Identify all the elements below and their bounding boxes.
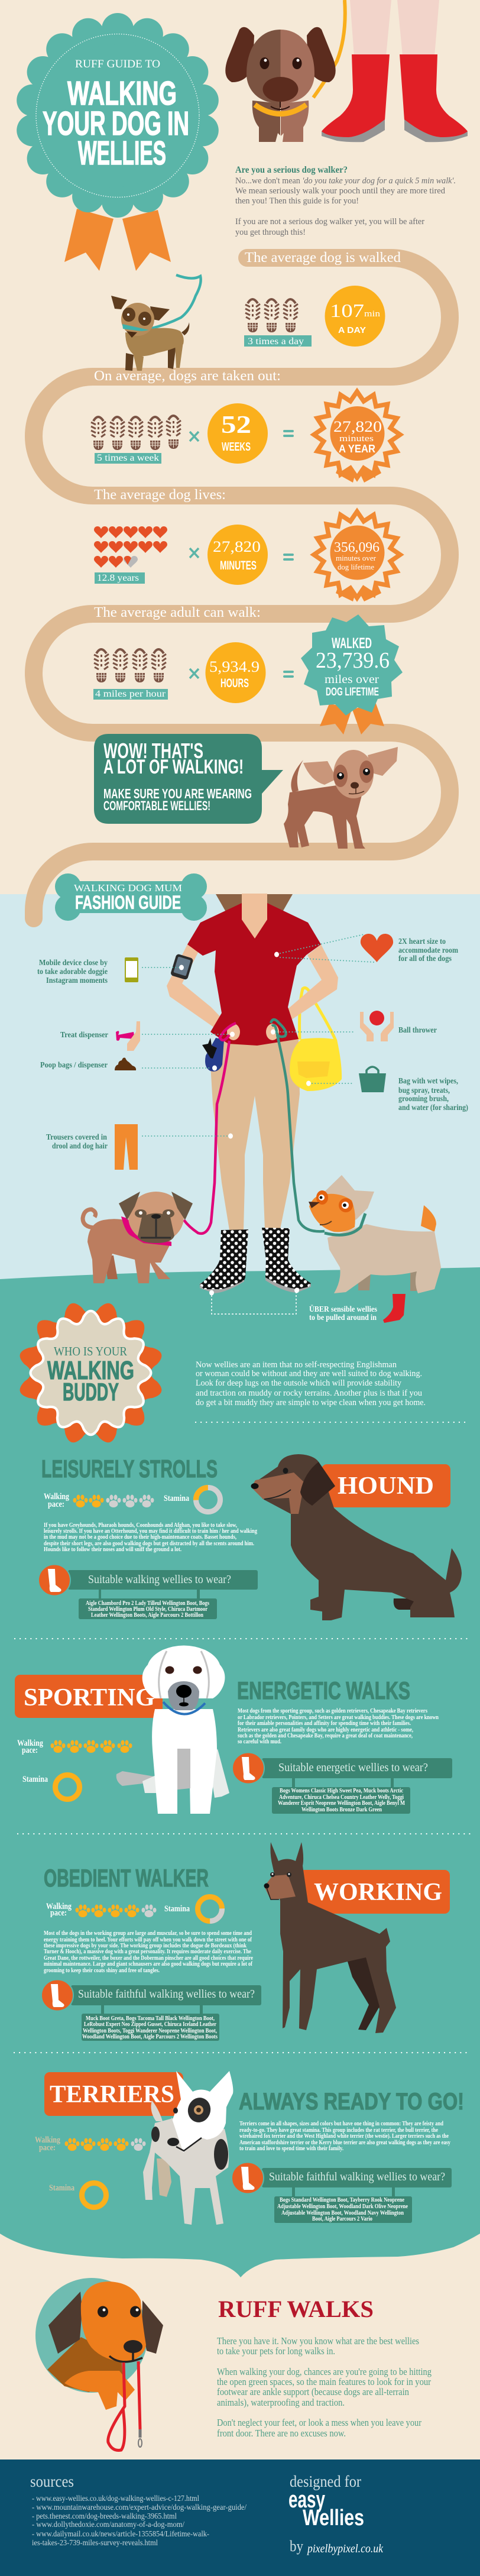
walking pace rating: pace: [39, 2143, 56, 2153]
suitable wellies box [38, 1565, 258, 1619]
title text [43, 58, 189, 172]
sources list [30, 2473, 247, 2548]
description: these impressive dogs by your side. The working group includes the dogue de Bordeaux (think [44, 1943, 247, 1949]
callout: mobile device: Instagram moments [46, 976, 108, 985]
icon: poop [115, 1057, 136, 1070]
credits: designed for [290, 2473, 361, 2490]
closing text: ruff walks: When walking your dog, chances are you're going to be hitting [217, 2366, 432, 2377]
walking pace rating: pace: [22, 1746, 38, 1755]
hair [216, 894, 293, 911]
intro text: you get through this! [235, 228, 306, 237]
stamina ring: Stamina [164, 1904, 190, 1914]
suitable wellies box: Wellington Boots, Toggi Wanderer Neoprene Wellington Boot, [83, 2028, 217, 2034]
suitable wellies box: Suitable faithful walking wellies to wear? [78, 1988, 255, 2001]
stat: 4 miles per hour [93, 649, 168, 700]
icon: treat in hand [116, 1021, 140, 1051]
description [239, 2121, 451, 2152]
tag: sporting: SPORTING [24, 1684, 155, 1711]
description: despite their short legs, are also good walking dogs but get distracted by all the scents around him. [44, 1541, 254, 1547]
illustration: doberman [264, 1842, 396, 2033]
red shirt [187, 903, 321, 1046]
stamina ring: Stamina [49, 2183, 74, 2193]
illustration: legs in red wellies [322, 0, 468, 142]
suitable wellies box: Wanderer Esprit Neoprene Wellington Boot, Aigle Benyl M [278, 1800, 405, 1807]
walking pace rating: Walking [35, 2135, 60, 2145]
callout: treat dispenser: Treat dispenser [60, 1030, 108, 1039]
callout: trousers: Trousers covered in [46, 1132, 107, 1141]
panel: sporting [15, 1645, 452, 1814]
illustration: orange dog with red lead [35, 2278, 163, 2450]
intro text: then you! Then this guide is for you! [235, 196, 359, 206]
closing text: ruff walks: There you have it. Now you know what are the best wellies [217, 2335, 419, 2347]
description: Hounds like to follow their noses and will sniff the ground a lot. [44, 1546, 181, 1553]
callout: treat dispenser [60, 1021, 235, 1051]
suitable wellies box: LeRobust Expert Neo Zipped Gusset, Chiruca Iceland Leather [84, 2021, 216, 2028]
suitable wellies box: Standard Wellington Plum Old Style, Chiruca Dartmoor [88, 1606, 207, 1613]
section background: fashion guide sky [0, 894, 480, 1284]
sunburst: 356,096 minutes: dog lifetime [338, 562, 374, 571]
illustration: brown dog with yellow leash [225, 0, 345, 142]
sources list: - www.mountainwarehouse.com/expert-advice/dog-walking-gear-guide/ [32, 2503, 247, 2512]
equals sign [284, 672, 293, 677]
walking pace rating: pace: [50, 1908, 67, 1918]
illustration: dog walker woman [167, 894, 342, 1293]
stat circle: 27,820 minutes: MINUTES [220, 559, 257, 572]
intro text [235, 165, 456, 237]
credits: by [290, 2538, 303, 2555]
tag: working: WORKING [314, 1879, 442, 1906]
callout: wellies bracket [209, 1288, 406, 1323]
suitable wellies box [41, 1980, 261, 2041]
closing text: ruff walks: animals), waterproofing and traction. [217, 2397, 345, 2408]
fashion guide bone banner: FASHION GUIDE [75, 892, 181, 913]
section background: teal hill and breeds panel [0, 1267, 480, 2277]
stat: 5 times a week [91, 416, 181, 464]
stat circle: 5,934.9 hours [206, 642, 266, 703]
callout: bag: Bag with wet wipes, [398, 1076, 458, 1085]
tag: terriers: TERRIERS [50, 2081, 174, 2108]
stat: 5 times a week: 5 times a week [97, 453, 159, 463]
rosette: walked 23,739.6 miles: WALKED [332, 635, 372, 652]
neck and arms [167, 894, 338, 1032]
speech bubble [94, 734, 283, 824]
panel: terriers [35, 2071, 464, 2225]
stat: 4 miles per hour: 4 miles per hour [95, 689, 166, 699]
fashion guide bone banner [55, 873, 207, 921]
credits: Wellies [303, 2506, 364, 2530]
speech bubble: A LOT OF WALKING! [103, 756, 244, 778]
road heading: average dog walked: The average dog is walked [245, 250, 401, 266]
credits [288, 2473, 384, 2555]
callout: poop bags [40, 1057, 217, 1070]
callout: mobile device: Mobile device close by [39, 958, 108, 967]
description: in the mud may not be a good choice due to their high-maintenance coats. Basset hounds, [44, 1534, 236, 1541]
stat circle: 27,820 minutes [207, 525, 268, 585]
suitable wellies box: Bogs Standard Wellington Boot, Tayberry Rook Neoprene [280, 2197, 404, 2203]
stamina ring [22, 1775, 79, 1799]
badge: who is your walking buddy: WHO IS YOUR [54, 1344, 127, 1358]
walking pace rating [35, 2135, 145, 2153]
walking pace rating: Walking [17, 1739, 43, 1748]
stat circle: 52 weeks: 52 [221, 412, 251, 439]
multiply sign [190, 548, 199, 558]
description: so careful with mud. [238, 1739, 281, 1745]
icon: small red welly [383, 1294, 406, 1323]
stat circle: 107 min a day: min [364, 309, 381, 319]
callout: ball thrower: Ball thrower [398, 1025, 437, 1034]
sunburst: 356,096 minutes: 356,096 [334, 540, 380, 555]
stat circle: 107 min a day: 107 [330, 300, 364, 321]
intro paragraph: wellies: Look for deep lugs on the outsole which will provide stability [196, 1378, 401, 1388]
stat: 3 times a day: 3 times a day [248, 336, 304, 347]
intro paragraph: wellies: do get a bit muddy they are simple to wipe clean when you get home. [196, 1398, 426, 1407]
description: Most of the dogs in the working group are large and muscular, so be sure to spend some time and [44, 1930, 252, 1937]
heading: leisurely strolls: LEISURELY STROLLS [41, 1455, 218, 1483]
icon: hands and ball [360, 1011, 394, 1041]
description: Retrievers are also great family dogs who are highly energetic and athletic - some, [238, 1727, 413, 1733]
callout: trousers [46, 1124, 233, 1170]
stamina ring: Stamina [22, 1775, 48, 1784]
suitable wellies box: Woodland Wellington Boot, Aigle Parcours 2 Wellington Boots [82, 2034, 218, 2040]
icon: three boot prints [245, 299, 298, 332]
illustration: bull terrier [143, 2071, 233, 2225]
closing text: ruff walks: Don't neglect your feet, or look a mess when you leave your [217, 2417, 421, 2428]
badge: who is your walking buddy [20, 1299, 162, 1446]
panel: hound [38, 1454, 462, 1620]
suitable wellies box: Suitable faithful walking wellies to wear? [269, 2170, 445, 2183]
callout: mobile device [37, 957, 184, 985]
fashion guide bone banner: WALKING DOG MUM [74, 882, 182, 894]
description [238, 1708, 439, 1745]
sources list: - www.dollythedoxie.com/anatomy-of-a-dog-mom/ [32, 2520, 184, 2529]
heading: energetic walks: ENERGETIC WALKS [237, 1677, 410, 1704]
closing text: ruff walks: to take your pets for long walks in. [217, 2345, 335, 2357]
icon: heart rows [94, 526, 167, 568]
description: to train and love to spend time with their family. [239, 2145, 343, 2152]
intro text: Are you a serious dog walker? [235, 165, 348, 175]
icon: orange trousers [115, 1124, 138, 1170]
description: ready-to-go. They have great stamina. This group includes the rat terrier, the bull terrier, the [239, 2127, 438, 2134]
stat circle: 107 min a day [325, 286, 385, 347]
description: for their amiable personalities and affinity for spending time with their families. [238, 1720, 411, 1727]
stat circle: 52 weeks [207, 403, 268, 464]
phone armband [170, 953, 194, 980]
callout: big heart: 2X heart size to [398, 937, 446, 946]
suitable wellies box: Aigle Chambord Pro 2 Lady Tilleul Wellington Boot, Bogs [86, 1600, 209, 1607]
road heading: dog lives: The average dog lives: [94, 487, 226, 503]
rosette: walked 23,739.6 miles [301, 614, 403, 734]
description: minimal maintenance. Large and giant schnausers are also good walking dogs but require a lot of [44, 1961, 252, 1967]
suitable wellies box: Bogs Womens Classic High Sweet Pea, Muck boots Arctic [280, 1788, 403, 1794]
description: Most dogs from the sporting group, such as golden retrievers, Chesapeake Bay retrievers [238, 1708, 427, 1714]
suitable wellies box: Suitable walking wellies to wear? [88, 1573, 231, 1586]
rosette: walked 23,739.6 miles: 23,739.6 [316, 648, 390, 673]
callout: trousers: drool and dog hair [52, 1141, 108, 1150]
closing text: ruff walks: RUFF WALKS [218, 2296, 374, 2322]
title text: WELLIES [78, 134, 166, 172]
illustration: pug [83, 1192, 193, 1283]
description: grooming to keep their coats shiny and free of tangles. [44, 1967, 160, 1974]
stamina ring [49, 2183, 106, 2207]
stat circle: 52 weeks: WEEKS [222, 441, 251, 454]
illustration: tan chihuahua [284, 747, 398, 849]
stamina ring [164, 1897, 222, 1921]
suitable wellies box [232, 1753, 452, 1814]
intro paragraph: wellies: or woman could be without and they are well suited to dog walking. [196, 1369, 422, 1378]
closing text: ruff walks [217, 2296, 432, 2439]
road heading: taken out: On average, dogs are taken out: [94, 368, 281, 384]
polka dot wellies [200, 1228, 311, 1293]
callout: mobile device: to take adorable doggie [37, 967, 108, 976]
description: energy training them to heel. Your efforts will pay off when you walk down the street with one of [44, 1937, 252, 1943]
icon: green bag [359, 1067, 386, 1092]
stat circle: 5,934.9 hours: HOURS [220, 677, 249, 690]
description [44, 1522, 258, 1553]
icon: heart [361, 934, 393, 962]
credits: easy [288, 2487, 326, 2513]
callout: poop bags: Poop bags / dispenser [40, 1060, 108, 1069]
pink leash [184, 1023, 236, 1234]
sources list: - www.dailymail.co.uk/news/article-1355854/Lifetime-walk- [32, 2530, 209, 2539]
credits: pixelbypixel.co.uk [306, 2542, 384, 2555]
badge: who is your walking buddy: WALKING [47, 1356, 134, 1385]
callout: bag: and water (for sharing) [398, 1103, 468, 1112]
callout: bag [306, 1067, 468, 1112]
sources list: - www.easy-wellies.co.uk/dog-walking-wellies-c-127.html [32, 2494, 199, 2503]
sunburst: 356,096 minutes: minutes over [336, 554, 377, 562]
icon: phone [125, 957, 138, 982]
illustration: labrador [116, 1645, 229, 1814]
stamina ring [164, 1488, 220, 1512]
sunburst: 27,820 minutes a year: 27,820 [333, 418, 382, 435]
icon: four boot prints [94, 649, 166, 682]
intro text: If you are not a serious dog walker yet, you will be after [235, 217, 424, 226]
title text: WALKING [67, 75, 177, 112]
suitable wellies box: Muck Boot Greta, Bogs Tacoma Tall Black Wellington Boot, [86, 2015, 215, 2022]
stat circle: 27,820 minutes: 27,820 [213, 538, 261, 555]
poop bag dispenser [205, 1038, 224, 1072]
intro text: No...we don't mean 'do you take your dog for a quick 5 min walk'. [235, 176, 456, 186]
badge ribbon tails [64, 209, 171, 271]
multiply sign [190, 669, 199, 678]
suitable wellies box: Adventure, Chiruca Chelsea Country Leather Welly, Toggi [279, 1794, 404, 1801]
speech bubble: MAKE SURE YOU ARE WEARING [103, 786, 252, 801]
speech bubble: WOW! THAT'S [103, 739, 203, 763]
callout: ball thrower [271, 1011, 437, 1041]
rosette: walked 23,739.6 miles: DOG LIFETIME [326, 686, 379, 698]
intro paragraph: wellies: and traction on muddy or rocky terrains. Another plus is that if you [196, 1389, 422, 1398]
closing text: ruff walks: footwear are ankle support (because dogs are all-terrain [217, 2386, 409, 2397]
equals sign [284, 431, 293, 436]
road heading: adult can walk: The average adult can walk: [94, 605, 261, 620]
icon: five boot prints [91, 416, 181, 450]
walking pace rating [17, 1739, 132, 1755]
intro text: We mean seriously walk your pooch until they are more tired [235, 186, 446, 196]
illustration: dachshund [251, 1454, 462, 1620]
stat: 12.8 years of hearts: 12.8 years [97, 573, 139, 583]
walking pace rating: pace: [48, 1500, 64, 1509]
title text: RUFF GUIDE TO [75, 58, 160, 70]
scalloped rosette [17, 13, 219, 218]
tag: hound [322, 1464, 450, 1507]
trousers [210, 1039, 300, 1230]
description: such as the golden and Chesapeake Bay, require a great deal of coat maintenance, [238, 1733, 413, 1739]
suitable wellies box: Adjustable Wellington Boot, Woodland Navy Wellington [281, 2210, 404, 2216]
description: leisurely strolls. If you have an Otterhound, you may find it difficult to train him / her and walking [44, 1528, 258, 1535]
closing text: ruff walks: the open green spaces, so the main features to look for in your [217, 2376, 431, 2387]
stat: 12.8 years of hearts [94, 526, 167, 584]
intro paragraph: wellies: Now wellies are an item that no self-respecting Englishman [196, 1360, 397, 1370]
winding road [34, 258, 450, 918]
description: If you have Greyhounds, Pharaoh hounds, Coonhounds and Afghan, you like to take slow, [44, 1522, 237, 1529]
callout: wellies bracket: to be pulled around in [309, 1313, 377, 1322]
description [44, 1930, 253, 1974]
callout: bag: grooming brush, [398, 1094, 449, 1103]
illustration: terrier with orange face [309, 1175, 441, 1293]
heading: obedient walker: OBEDIENT WALKER [44, 1864, 209, 1892]
multiply sign [190, 432, 199, 441]
suitable wellies box [232, 2162, 452, 2223]
sources list: sources [30, 2473, 74, 2490]
hands [227, 1024, 240, 1040]
callout: big heart: for all of the dogs [398, 954, 452, 963]
suitable wellies box: Wellington Boots Bronze Dark Green [301, 1807, 382, 1813]
callout: bag: bug spray, treats, [398, 1086, 450, 1095]
title text: YOUR DOG IN [43, 105, 189, 143]
closing text: ruff walks: front door. There are no excuses now. [217, 2428, 346, 2439]
walking pace rating: Walking [44, 1492, 69, 1501]
stat circle: 107 min a day: A DAY [338, 325, 366, 335]
title badge [17, 13, 219, 271]
tag: working [299, 1870, 450, 1914]
stat circle: 5,934.9 hours: 5,934.9 [209, 658, 260, 675]
sunburst: 27,820 minutes a year: minutes [339, 434, 374, 444]
green leash [271, 1020, 325, 1231]
illustration: chihuahua with teal leash [111, 275, 201, 371]
badge: who is your walking buddy: BUDDY [63, 1378, 119, 1406]
callout: big heart [274, 934, 459, 963]
footer [0, 2460, 480, 2576]
suitable wellies box: Leather Wellington Boots, Aigle Parcours 2 Bottillon [91, 1612, 203, 1619]
tag: terriers [44, 2072, 183, 2116]
sources list: - pets.thenest.com/dog-breeds-walking-3965.html [32, 2512, 177, 2521]
walking pace rating [44, 1492, 154, 1509]
intro paragraph: wellies [196, 1360, 426, 1407]
suitable wellies box: Boot, Aigle Parcours 2 Vario [312, 2216, 372, 2222]
rosette: walked 23,739.6 miles: miles over [325, 673, 379, 686]
tag: sporting [15, 1675, 163, 1718]
description: Great Dane, the rottweiler, the boxer and the Doberman pinscher are all good choices that require [44, 1955, 253, 1962]
suitable wellies box: Adjustable Wellington Boot, Woodland Dark Olive Neoprene [277, 2203, 408, 2210]
sources list: ies-takes-23-739-miles-survey-reveals.html [32, 2539, 158, 2548]
stamina ring: Stamina [164, 1494, 189, 1503]
description: Turner & Hooch), a massive dog with a great personality. It requires moderate daily exercise. The [44, 1949, 251, 1955]
suitable wellies box: Suitable energetic wellies to wear? [278, 1761, 428, 1774]
sunburst: 27,820 minutes a year: A YEAR [339, 443, 375, 455]
bag strap and body [290, 988, 342, 1091]
walking pace rating: Walking [46, 1902, 72, 1911]
equals sign [284, 555, 293, 559]
speech bubble: COMFORTABLE WELLIES! [103, 798, 210, 813]
sunburst: 27,820 minutes a year [314, 391, 400, 483]
callout: big heart: accommodate room [398, 946, 459, 954]
sunburst: 356,096 minutes [314, 512, 400, 601]
callout: wellies bracket: ÜBER sensible wellies [309, 1305, 377, 1313]
tag: hound: HOUND [338, 1473, 434, 1500]
panel: working [41, 1842, 450, 2041]
stat: 3 times a day [244, 299, 312, 347]
walking pace rating [46, 1902, 156, 1918]
